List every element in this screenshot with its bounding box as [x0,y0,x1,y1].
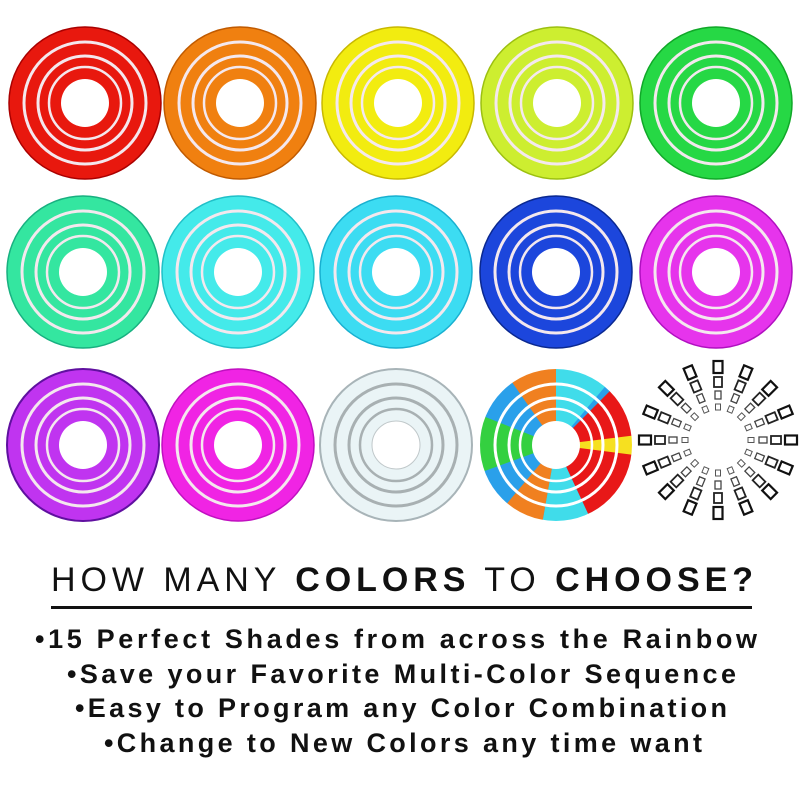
ring: orange [164,27,316,179]
ring: red [9,27,161,179]
ring: teal [7,196,159,348]
ring: magenta [640,196,792,348]
bullet list: •Easy to Program any Color Combination [75,693,727,723]
ring: pink [162,369,314,521]
ring: yellow [322,27,474,179]
bullet list: •15 Perfect Shades from across the Rainbow [35,624,758,654]
ring: blue [480,196,632,348]
icon: LED strip starburst [639,361,797,519]
title: HOW MANY COLORS TO CHOOSE? [51,561,753,599]
ring: yellow-green [481,27,633,179]
ring: sky cyan [320,196,472,348]
ring: cyan [162,196,314,348]
ring: white [320,369,472,521]
ring: multicolor [499,388,613,502]
bullet list: •Change to New Colors any time want [104,728,702,758]
bullet list: •Save your Favorite Multi-Color Sequence [67,659,736,689]
ring: green [640,27,792,179]
bullet list [35,624,758,758]
ring: purple [7,369,159,521]
